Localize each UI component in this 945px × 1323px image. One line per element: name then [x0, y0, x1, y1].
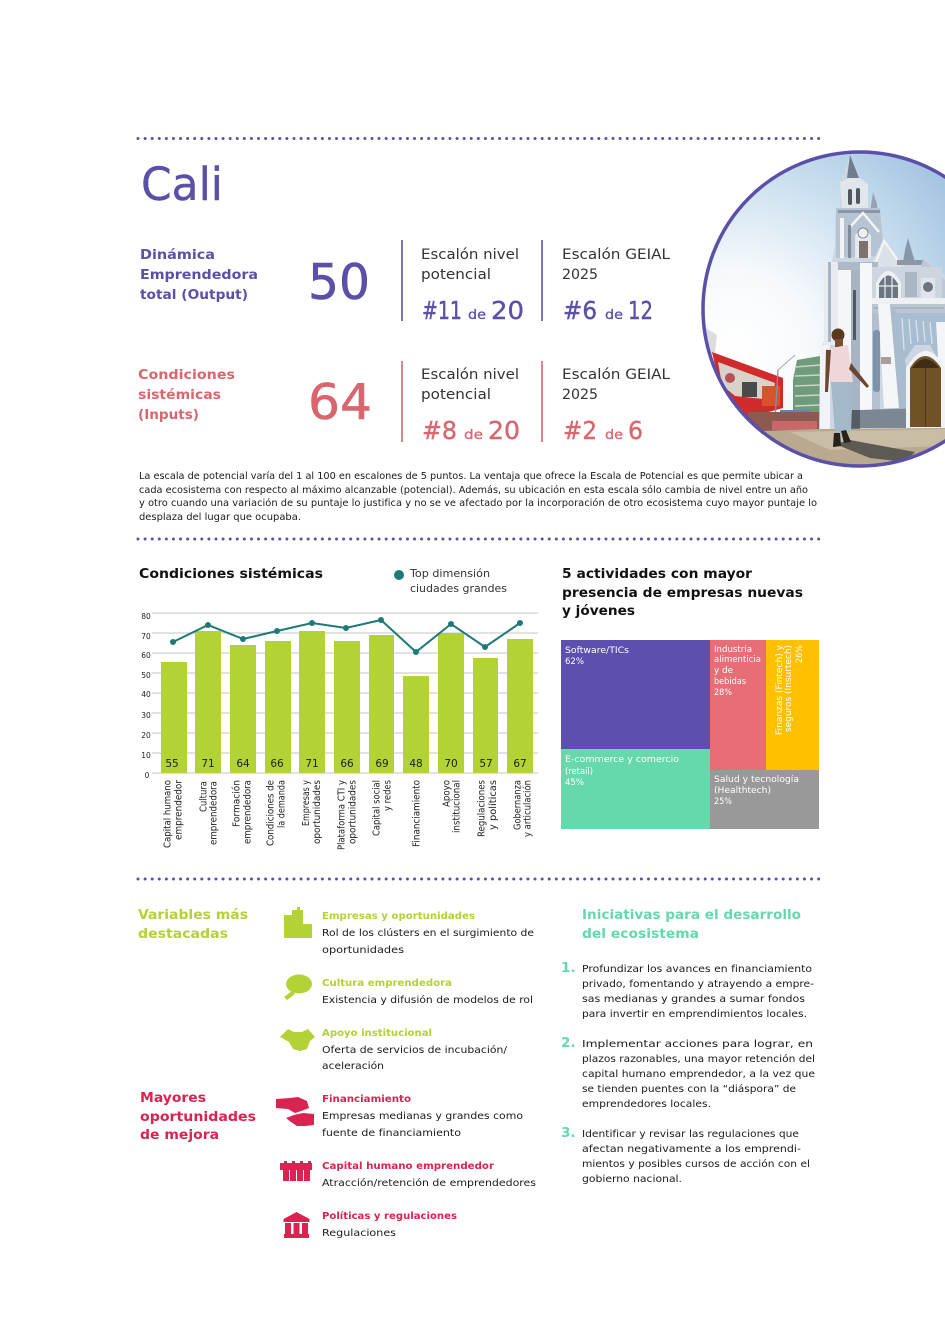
bar values: 69	[375, 758, 389, 770]
item: políticas y regulaciones: Regulaciones	[322, 1228, 396, 1239]
initiative 1: sas medianas y grandes a sumar fondos	[582, 994, 805, 1005]
category labels	[162, 780, 534, 850]
potential rank: 20	[488, 416, 520, 445]
icon: thought bubble	[284, 974, 312, 1000]
icon: people	[280, 1161, 312, 1181]
GEIAL rank: #2	[563, 416, 597, 445]
score 50: 50	[308, 254, 370, 311]
bar values: 66	[340, 758, 354, 770]
explanatory paragraph: y otro cuando una variación de su puntaje lo justifica y no se ve afectado por la incorporación de otro ecosistema cuyo mayor puntaje lo	[139, 497, 817, 509]
item: apoyo institucional: Oferta de servicios de incubación/	[322, 1044, 508, 1056]
tile: industria alimenticia: bebidas	[714, 677, 746, 687]
initiative 2	[561, 1035, 815, 1110]
potential rank: de	[468, 308, 486, 323]
y axis labels: 80	[141, 612, 151, 621]
category labels: y articulación	[522, 780, 534, 837]
potential rank: #11	[422, 296, 462, 325]
item: financiamiento: fuente de financiamiento	[322, 1128, 461, 1139]
y axis labels: 50	[141, 671, 151, 680]
heading: iniciativas: Iniciativas para el desarrollo	[582, 907, 801, 923]
y axis labels: 70	[141, 632, 151, 641]
tile: salud: (Healthtech)	[714, 786, 771, 796]
initiative 2: plazos razonables, una mayor retención del	[582, 1053, 815, 1065]
item: capital humano: Atracción/retención de emprendedores	[322, 1177, 536, 1189]
category labels: Regulaciones	[476, 780, 488, 837]
legend: top dimensión: ciudades grandes	[410, 583, 507, 595]
initiative 2: 2.	[561, 1035, 576, 1051]
item: financiamiento	[322, 1094, 523, 1139]
category labels: emprendedor	[174, 780, 184, 840]
heading: 5 actividades: y jóvenes	[562, 603, 635, 619]
tile: industria alimenticia: y de	[714, 666, 733, 676]
GEIAL rank: 6	[628, 416, 643, 445]
category labels: Capital humano	[162, 780, 174, 848]
tile: salud: 25%	[714, 797, 732, 807]
heading: variables más destacadas: destacadas	[138, 926, 228, 942]
heading: mayores oportunidades de mejora: de mejora	[140, 1127, 219, 1143]
initiative 2: capital humano emprendedor, a la vez que	[582, 1069, 815, 1080]
category labels: y políticas	[488, 780, 499, 830]
potential rank: #8	[422, 416, 457, 445]
tile: finanzas: seguros (Insurtech)	[784, 645, 794, 732]
category labels: Capital social	[372, 780, 382, 836]
bar values: 66	[270, 758, 284, 770]
initiative 1	[561, 960, 814, 1020]
initiative 1: para invertir en emprendimientos locales.	[582, 1009, 807, 1020]
label: condiciones: sistémicas	[138, 387, 221, 403]
potential level heading: potencial	[421, 387, 491, 403]
category labels: Financiamiento	[412, 780, 422, 847]
y axis labels: 60	[141, 651, 151, 660]
initiative 1: Profundizar los avances en financiamiento	[582, 964, 812, 975]
GEIAL rank: de	[605, 428, 623, 443]
line: top dimensión ciudades grandes	[170, 617, 523, 655]
category labels: institucional	[452, 780, 462, 833]
potential rank: 20	[491, 296, 524, 325]
heading: 5 actividades: 5 actividades con mayor	[562, 566, 752, 582]
legend: top dimensión: Top dimensión	[409, 568, 490, 580]
GEIAL rank: de	[605, 308, 623, 323]
item: empresas y oportunidades	[322, 911, 534, 956]
category labels: Gobernanza	[512, 780, 524, 830]
tile: industria alimenticia	[710, 640, 766, 770]
tile: salud: Salud y tecnología	[714, 775, 799, 785]
potential level heading: Escalón nivel	[421, 247, 519, 263]
tile: software: Software/TICs	[565, 646, 629, 656]
category labels: Formación	[232, 780, 242, 827]
initiative 3: mientos y posibles cursos de acción con el	[582, 1158, 810, 1170]
bar values	[165, 758, 527, 770]
category labels: Cultura	[198, 781, 210, 812]
icon: buildings	[284, 907, 312, 938]
category labels: oportunidades	[348, 780, 358, 844]
y axis labels: 10	[141, 751, 151, 760]
tile: e-commerce	[561, 749, 710, 829]
title: Cali	[141, 158, 223, 211]
bar values: 67	[513, 758, 527, 770]
y axis labels: 20	[141, 731, 151, 740]
potential level heading: Escalón nivel	[421, 367, 519, 383]
item: cultura emprendedora	[322, 978, 533, 1006]
bar values: 57	[479, 758, 493, 770]
item: apoyo institucional: aceleración	[322, 1060, 384, 1072]
heading: mayores oportunidades de mejora: oportunidades	[140, 1109, 256, 1125]
label: condiciones: Condiciones	[138, 367, 235, 383]
GEIAL rank: 12	[628, 296, 653, 325]
potential rank: de	[464, 428, 483, 443]
row: Dinámica Emprendedora total (Output)	[140, 240, 670, 325]
legend: top dimensión	[394, 568, 507, 595]
GEIAL heading: 2025	[562, 387, 598, 403]
bar values: 64	[236, 758, 250, 770]
icon: institution building	[284, 1212, 310, 1238]
label: dinámica: Dinámica	[140, 247, 215, 263]
item: empresas y oportunidades: oportunidades	[322, 945, 404, 956]
category labels: Empresas y	[301, 780, 312, 826]
initiative 2: se tienden puentes con la “diáspora” de	[582, 1083, 796, 1095]
initiative 3: 3.	[561, 1125, 576, 1141]
tile: software: 62%	[565, 657, 584, 667]
item: financiamiento: Financiamiento	[322, 1094, 411, 1105]
GEIAL rank: #6	[563, 296, 597, 325]
heading: 5 actividades: presencia de empresas nuevas	[562, 585, 803, 601]
y axis labels	[141, 612, 151, 780]
item: cultura emprendedora: Existencia y difusión de modelos de rol	[322, 994, 533, 1006]
initiative 3	[561, 1125, 810, 1185]
item: capital humano: Capital humano emprendedor	[322, 1161, 494, 1172]
label: condiciones: (Inputs)	[138, 407, 199, 423]
tile: finanzas: Finanzas (Fintech) y	[775, 644, 785, 735]
photo: church of La Ermita in a circle	[700, 150, 945, 470]
tile: finanzas	[766, 640, 819, 770]
bar values: 71	[305, 758, 319, 770]
category labels: Apoyo	[442, 780, 452, 807]
tile: e-commerce: (retail)	[565, 767, 593, 777]
item: financiamiento: Empresas medianas y grandes como	[322, 1111, 523, 1122]
treemap: 5 actividades	[561, 640, 819, 829]
GEIAL heading: Escalón GEIAL	[562, 247, 670, 263]
tile: finanzas: 26%	[795, 645, 805, 663]
category labels: Plataforma CTI y	[336, 780, 348, 850]
item: apoyo institucional: Apoyo institucional	[322, 1028, 432, 1039]
category labels: emprendedora	[242, 780, 254, 844]
potential level heading: potencial	[421, 267, 491, 283]
category labels: emprendedora	[208, 781, 220, 845]
bars	[161, 631, 533, 773]
icon: hands	[276, 1097, 314, 1126]
category labels: oportunidades	[312, 780, 323, 844]
heading: variables más destacadas: Variables más	[138, 907, 248, 923]
y axis labels: 40	[141, 690, 151, 699]
tile: salud	[710, 770, 819, 829]
tile: e-commerce: E-commerce y comercio	[565, 755, 680, 765]
explanatory paragraph: cada ecosistema con respecto al máximo alcanzable (potencial). Además, su ubicación en esta escala sólo cambia de nivel entre un año	[139, 484, 808, 496]
score 64: 64	[308, 374, 372, 431]
initiative 2: Implementar acciones para lograr, en	[582, 1039, 813, 1050]
bar values: 55	[165, 758, 179, 770]
initiative 1: privado, fomentando y atrayendo a empre-	[582, 979, 814, 990]
initiative 3: afectan negativamente a los emprendi-	[582, 1144, 801, 1155]
bar values: 48	[409, 758, 423, 770]
tile: e-commerce: 45%	[565, 778, 584, 788]
icon: support map	[280, 1029, 315, 1051]
explanatory paragraph: La escala de potencial varía del 1 al 100 en escalones de 5 puntos. La ventaja que ofrece la Escala de Potencial es que permite ubicar a	[139, 470, 803, 482]
bar values: 70	[444, 758, 458, 770]
category labels: la demanda	[276, 780, 288, 828]
label: dinámica: total (Output)	[140, 287, 248, 303]
tile: industria alimenticia: Industria	[714, 645, 752, 655]
bar values: 71	[201, 758, 215, 770]
tile: software	[561, 640, 710, 749]
item: políticas y regulaciones	[322, 1210, 457, 1239]
category labels: y redes	[382, 780, 394, 811]
initiative 2: emprendedores locales.	[582, 1099, 711, 1110]
heading: iniciativas: del ecosistema	[582, 926, 699, 942]
explanatory paragraph: desplaza del lugar que ocupaba.	[139, 512, 301, 523]
row: Condiciones sistémicas (Inputs)	[138, 361, 670, 445]
item: empresas y oportunidades: Rol de los clústers en el surgimiento de	[322, 927, 534, 939]
item: apoyo institucional	[322, 1028, 508, 1072]
tile: industria alimenticia: alimenticia	[714, 655, 761, 665]
item: cultura emprendedora: Cultura emprendedora	[322, 978, 452, 989]
bar chart: condiciones sistémicas	[141, 612, 538, 850]
initiative 3: gobierno nacional.	[582, 1174, 682, 1185]
heading: mayores oportunidades de mejora: Mayores	[140, 1090, 206, 1106]
item: políticas y regulaciones: Políticas y regulaciones	[322, 1210, 457, 1222]
initiative 1: 1.	[561, 960, 576, 976]
label: dinámica: Emprendedora	[140, 267, 258, 283]
initiative 3: Identificar y revisar las regulaciones que	[582, 1129, 799, 1140]
heading: condiciones sistémicas: Condiciones sistémicas	[139, 566, 323, 582]
y axis labels: 30	[141, 711, 151, 720]
category labels: Condiciones de	[266, 780, 276, 846]
GEIAL heading: 2025	[562, 267, 598, 283]
item: empresas y oportunidades: Empresas y oportunidades	[322, 911, 475, 922]
tile: industria alimenticia: 28%	[714, 688, 732, 698]
item: capital humano	[322, 1161, 536, 1189]
GEIAL heading: Escalón GEIAL	[562, 367, 670, 383]
y axis labels: 0	[145, 771, 150, 780]
